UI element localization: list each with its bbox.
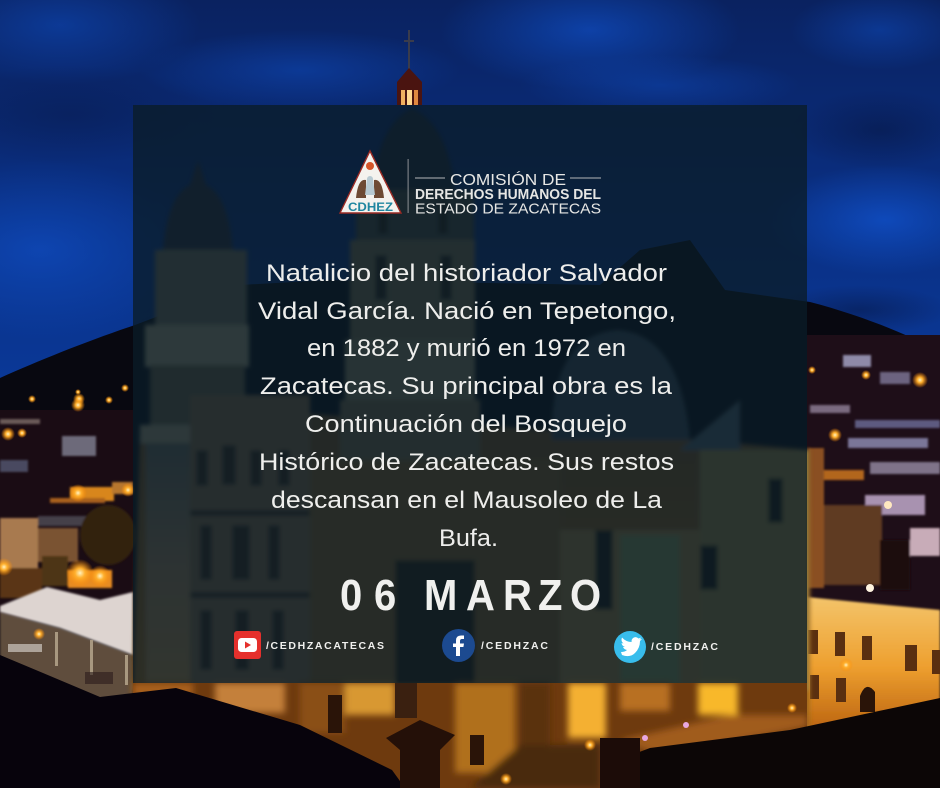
background: white tent roof bbox=[0, 587, 133, 700]
logo text: commission name bbox=[415, 172, 601, 218]
social: YouTube: /CEDHZACATECAS bbox=[266, 640, 384, 652]
background: left hillside city lights bbox=[0, 384, 136, 620]
logo text: commission name: ESTADO DE ZACATECAS bbox=[415, 202, 601, 218]
cathedral cross and lantern above the panel bbox=[397, 30, 422, 105]
text block: biography: Zacatecas. Su principal obra es la bbox=[260, 373, 672, 400]
central tower bbox=[372, 108, 455, 190]
logo text: commission name: COMISIÓN DE bbox=[450, 172, 566, 189]
text block: biography: en 1882 y murió en 1972 en bbox=[307, 335, 626, 362]
foreground: dark rooftops bbox=[0, 655, 940, 788]
background: cathedral bbox=[133, 108, 810, 788]
icon: YouTube bbox=[234, 631, 261, 659]
background: right hillside city lights bbox=[807, 335, 940, 620]
text block: biography: Histórico de Zacatecas. Sus restos bbox=[259, 449, 674, 476]
background: lit cathedral base below the panel bbox=[133, 683, 807, 788]
social: YouTube bbox=[234, 631, 384, 659]
text block: biography: Bufa. bbox=[439, 525, 498, 552]
icon: Twitter bbox=[614, 631, 646, 663]
logo: CDHEZ bbox=[340, 151, 601, 218]
background: night sky with clouds bbox=[0, 0, 940, 420]
text block: biography: Natalicio del historiador Salvador bbox=[266, 260, 667, 287]
panel: translucent dark overlay bbox=[133, 105, 807, 683]
lower centre and right nave bbox=[310, 460, 560, 700]
text block: biography: Continuación del Bosquejo bbox=[305, 411, 627, 438]
background: dark hills bbox=[0, 240, 940, 620]
icon: CDHEZ triangle emblem: CDHEZ bbox=[348, 200, 393, 214]
social: Twitter: /CEDHZAC bbox=[651, 641, 718, 653]
left tower bbox=[163, 160, 233, 250]
date heading: 06 MARZO bbox=[340, 570, 601, 619]
icon: CDHEZ triangle emblem bbox=[340, 151, 401, 214]
facade bbox=[190, 395, 310, 695]
icon: Facebook bbox=[442, 629, 475, 662]
text block: biography: descansan en el Mausoleo de La bbox=[271, 487, 662, 514]
logo text: commission name: DERECHOS HUMANOS DEL bbox=[415, 187, 601, 203]
social: Facebook bbox=[442, 629, 548, 662]
social: Facebook: /CEDHZAC bbox=[481, 640, 548, 652]
text block: biography: Vidal García. Nació en Tepetongo, bbox=[258, 298, 676, 325]
text block: biography bbox=[258, 260, 676, 552]
background: illuminated buildings lower right bbox=[807, 597, 940, 735]
social: Twitter bbox=[614, 631, 718, 663]
